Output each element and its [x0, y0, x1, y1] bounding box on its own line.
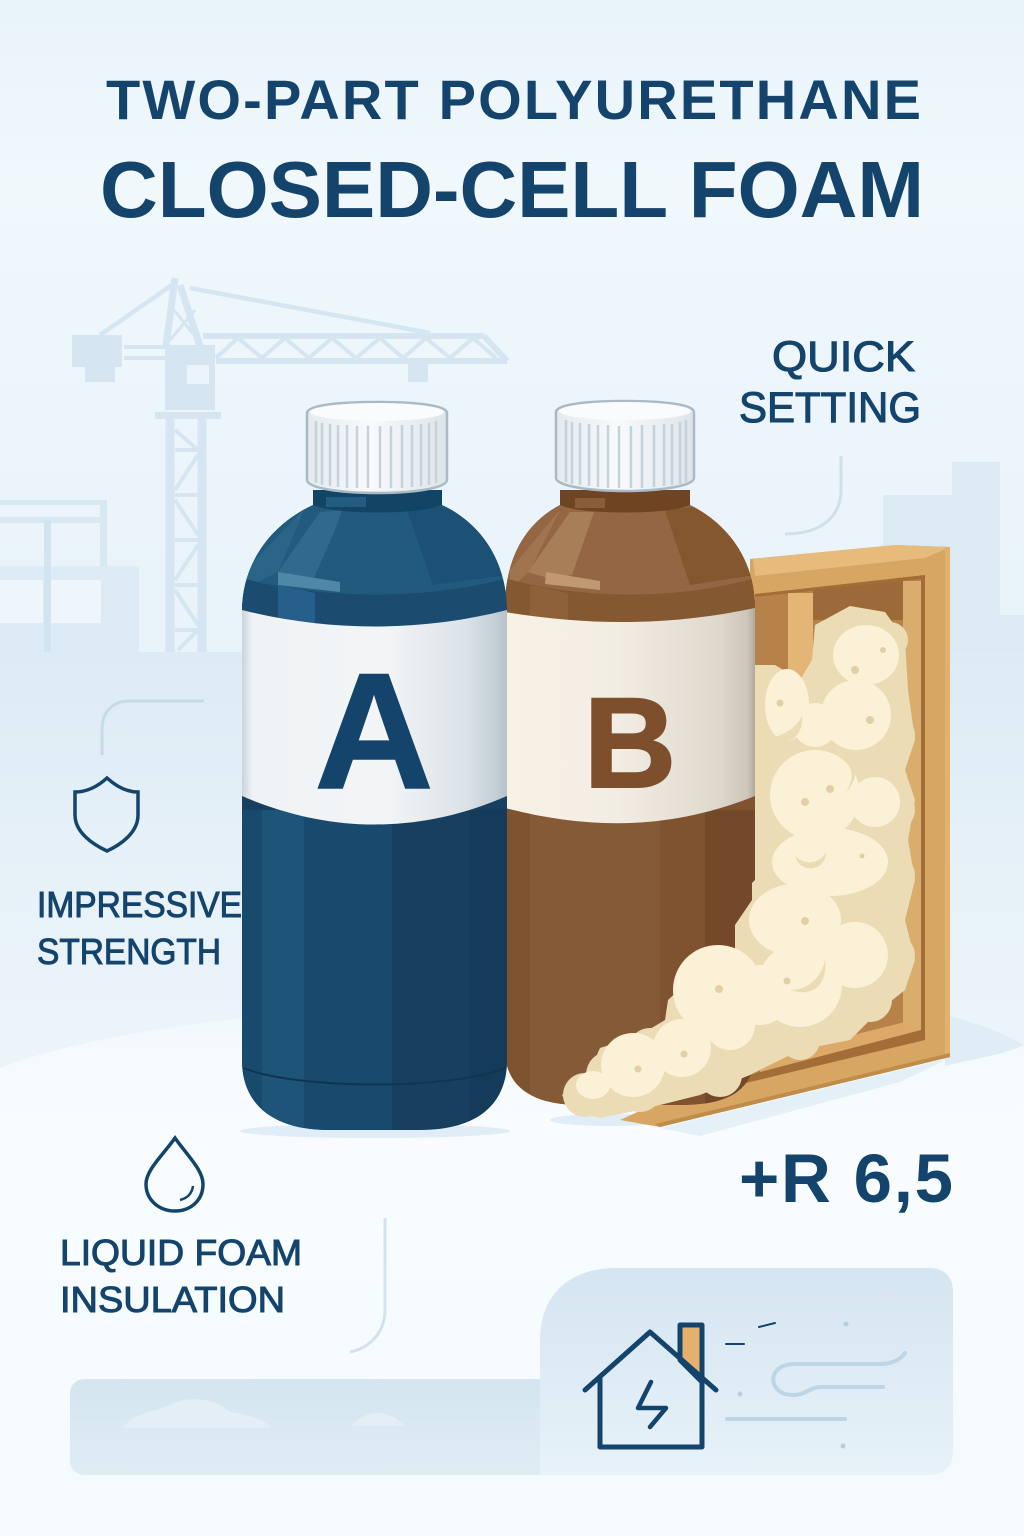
background: ground curve	[0, 1000, 1024, 1536]
icon: house	[585, 1332, 716, 1447]
title	[100, 68, 924, 234]
callout: liquid foam insulation: LIQUID FOAM	[60, 1232, 302, 1273]
bottle A cap	[307, 402, 447, 493]
bottle B letter: B	[584, 672, 676, 815]
wooden frame	[620, 545, 950, 1127]
callout: quick setting: SETTING	[739, 384, 921, 432]
frame bottom lip	[655, 1053, 950, 1127]
connector line: liquid foam	[350, 1218, 385, 1352]
bottle A label	[242, 610, 507, 824]
callout: quick setting: QUICK	[772, 333, 915, 381]
icon: water drop	[146, 1138, 203, 1211]
bottle A shoulder	[242, 505, 507, 608]
bottle A	[242, 402, 507, 1140]
bottle A letter: A	[314, 639, 434, 823]
bottle A lower shoulder ring	[242, 578, 507, 630]
frame top rail highlight	[753, 545, 950, 576]
foam mass	[562, 606, 915, 1118]
title: CLOSED-CELL FOAM	[100, 145, 924, 234]
bottle B	[505, 401, 755, 1110]
frame dark top strip	[813, 581, 903, 620]
frame edge	[945, 547, 950, 1057]
icon: shield	[75, 778, 138, 851]
bottle B cap	[556, 401, 694, 491]
foam light lumps	[576, 625, 900, 1099]
background: buildings left	[0, 500, 139, 656]
bottle B body	[505, 488, 755, 1110]
callout: impressive strength: IMPRESSIVE	[37, 884, 242, 925]
bottle B neck	[560, 488, 690, 512]
bottle A body	[242, 488, 507, 1140]
frame floor	[760, 1022, 921, 1072]
foam rim	[562, 606, 915, 1118]
icon: chimney	[680, 1325, 702, 1382]
background: haze band	[0, 652, 1024, 1092]
callout: liquid foam insulation	[60, 1232, 302, 1320]
bottle A base groove	[243, 1068, 506, 1084]
bottle A neck	[313, 488, 442, 512]
panel: house energy	[540, 1268, 953, 1475]
callout: impressive strength	[37, 884, 242, 972]
ground shadows	[240, 1015, 1024, 1138]
air flow lines	[726, 1323, 905, 1419]
title: TWO-PART POLYURETHANE	[106, 68, 921, 131]
bottle B label	[505, 608, 755, 823]
frame studs	[788, 593, 813, 682]
icon: lightning bolt	[638, 1382, 666, 1427]
callout: liquid foam insulation: INSULATION	[60, 1279, 285, 1320]
frame back wall	[700, 579, 921, 1088]
foam creases	[772, 715, 856, 992]
bottle B shoulder	[506, 505, 754, 595]
connector line: impressive strength	[102, 701, 204, 755]
background: construction crane	[72, 278, 507, 652]
connector line: quick setting	[785, 456, 841, 534]
frame inner cavity	[640, 575, 925, 1110]
R-value: +R 6,5	[739, 1140, 953, 1217]
background: buildings right	[883, 462, 1024, 700]
foam bubbles	[634, 647, 886, 1072]
bottom banner	[70, 1379, 540, 1475]
bottle B lower shoulder ring	[506, 579, 755, 620]
callout: quick setting	[739, 333, 921, 432]
callout: impressive strength: STRENGTH	[37, 931, 221, 972]
